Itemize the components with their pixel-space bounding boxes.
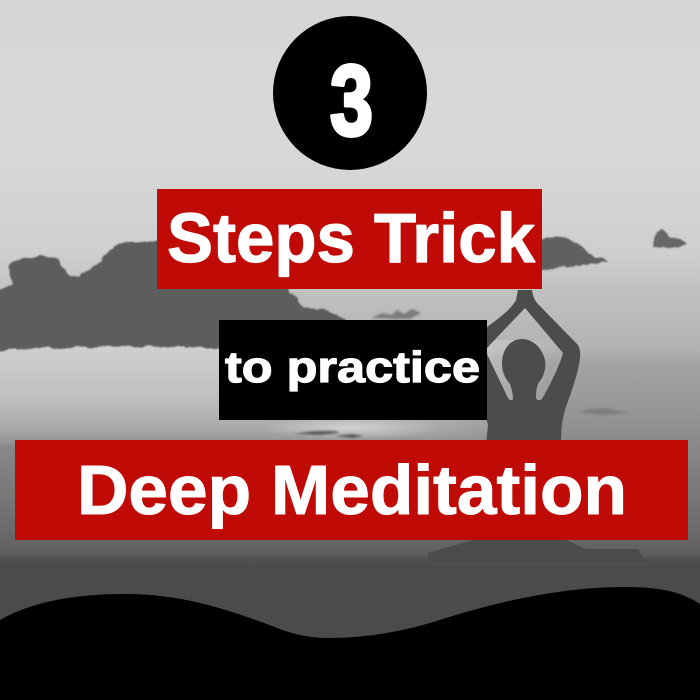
thin cloud specks right of the large cloud [371, 309, 421, 319]
heading: Steps Trick: Steps Trick [167, 199, 535, 277]
small cloud behind heading [535, 237, 608, 270]
heading: Deep Meditation [15, 440, 688, 540]
distant hills below the banner [428, 540, 650, 562]
large dark cloud [0, 240, 347, 352]
number badge [273, 16, 427, 170]
number badge: 3 [330, 45, 373, 157]
meditating person silhouette [470, 290, 580, 445]
heading: Deep Meditation: Deep Meditation [77, 451, 627, 529]
distant low cloud streak [578, 408, 630, 415]
reflections on the water [293, 431, 364, 438]
black wave at the bottom [0, 587, 700, 700]
subheading: to practice: to practice [225, 343, 480, 392]
small cloud at right [653, 229, 687, 248]
subheading: to practice [219, 320, 487, 420]
